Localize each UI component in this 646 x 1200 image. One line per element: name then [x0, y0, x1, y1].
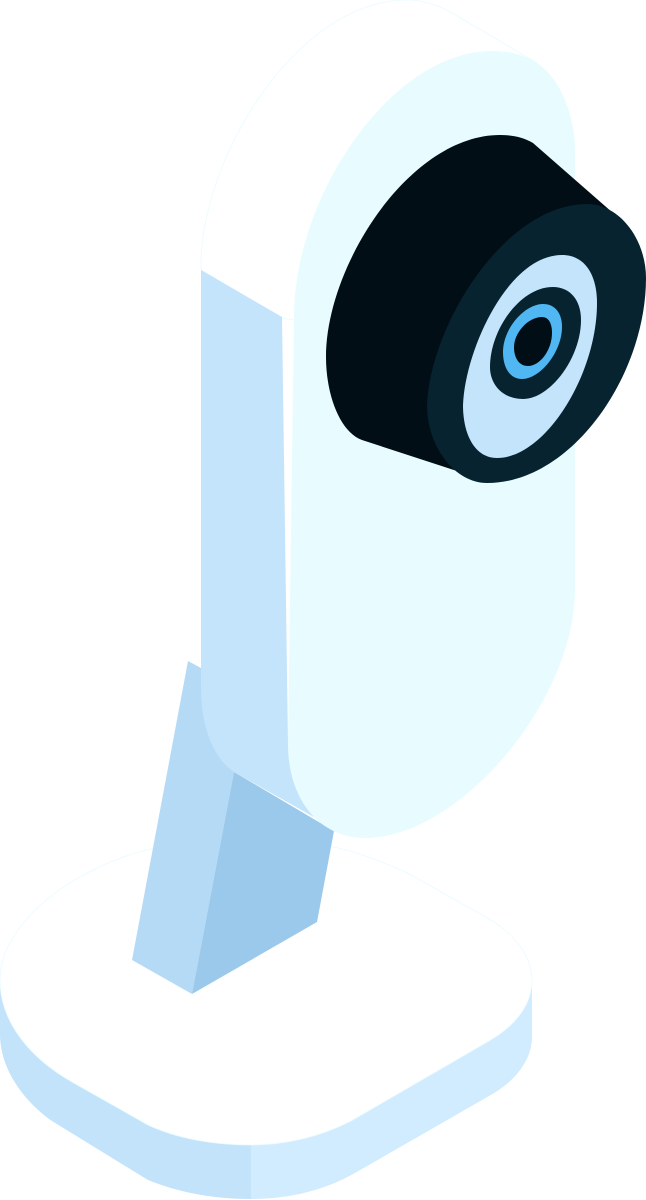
base top surface — [0, 843, 532, 1145]
base side: left shaded — [0, 980, 251, 1199]
body front face — [288, 51, 575, 838]
lens assembly — [326, 135, 646, 483]
stand left face — [132, 661, 234, 994]
base side: right lighter — [251, 980, 532, 1199]
lens pupil — [514, 317, 552, 366]
stand right face — [192, 772, 334, 994]
body left side panel — [201, 270, 335, 829]
stand: neck connecting base to body — [132, 661, 334, 994]
base: camera foot — [0, 843, 532, 1199]
lens dark ring — [490, 287, 581, 399]
lens light ring — [463, 255, 597, 458]
lens blue ring — [503, 304, 562, 379]
camera body — [201, 0, 575, 838]
lens front disc — [427, 204, 646, 483]
body top surface — [201, 0, 537, 320]
lens barrel — [326, 135, 613, 472]
